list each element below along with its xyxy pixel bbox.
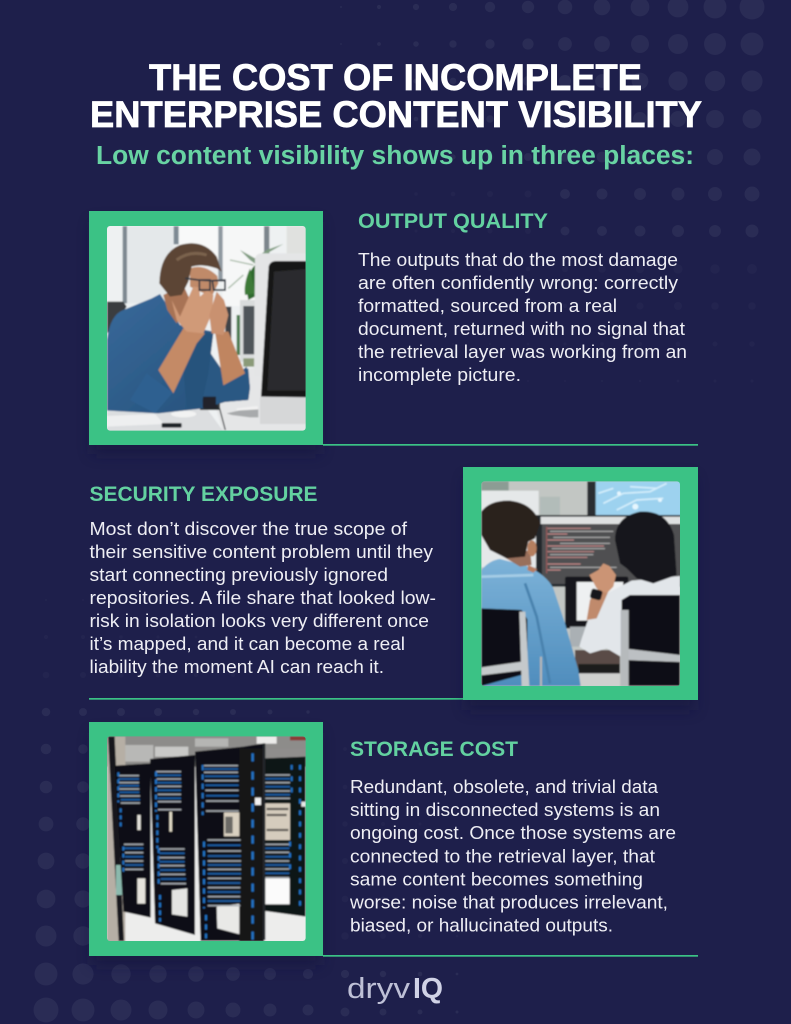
photo: two developers at monitors: [480, 480, 682, 687]
photo frame: output quality: [89, 211, 323, 454]
text: storage cost body: Redundant, obsolete, and trivial data: [350, 776, 659, 797]
text: security exposure body: liability the moment AI can reach it.: [90, 656, 384, 677]
text: security exposure body: it’s mapped, and it can become a real: [90, 633, 405, 654]
photo frame: storage cost: [89, 722, 323, 965]
text: output quality body: The outputs that do the most damage: [358, 249, 678, 270]
panel: security exposure: [89, 467, 698, 710]
text: storage cost body: same content becomes something: [350, 868, 643, 890]
logo: dryvIQ: dryv: [347, 973, 411, 1005]
text: output quality body: are often confidently wrong: correctly: [358, 272, 679, 293]
text: storage cost body: ongoing cost. Once those systems are: [350, 822, 676, 843]
text: output quality body: [358, 249, 687, 385]
text: output quality body: incomplete picture.: [358, 364, 521, 385]
heading: output quality: OUTPUT QUALITY: [358, 209, 548, 233]
logo: dryvIQ: IQ: [413, 973, 443, 1005]
text: storage cost body: worse: noise that produces irrelevant,: [349, 892, 668, 912]
text: storage cost body: [349, 776, 676, 936]
text: storage cost body: biased, or hallucinated outputs.: [350, 914, 613, 936]
text: output quality body: the retrieval layer was working from an: [358, 341, 687, 362]
text: security exposure body: [90, 518, 436, 677]
logo: dryvIQ: [347, 973, 443, 1005]
photo: stressed man at desk: [105, 223, 308, 433]
photo: server racks: [106, 735, 307, 945]
text: security exposure body: repositories. A file share that looked low-: [90, 587, 436, 608]
text: security exposure body: risk in isolation looks very different once: [90, 610, 429, 631]
text: security exposure body: start connecting previously ignored: [90, 564, 388, 585]
heading: security exposure: SECURITY EXPOSURE: [90, 482, 318, 506]
text: security exposure body: Most don’t discover the true scope of: [90, 518, 408, 539]
subtitle: Low content visibility shows up in three places:: [96, 142, 694, 170]
heading: storage cost: STORAGE COST: [350, 737, 518, 761]
text: security exposure body: their sensitive content problem until they: [90, 541, 434, 562]
panel: storage cost: [89, 722, 698, 965]
title: [90, 56, 702, 135]
text: output quality body: document, returned with no signal that: [358, 318, 686, 339]
text: storage cost body: sitting in disconnected systems is an: [350, 799, 660, 820]
title: THE COST OF INCOMPLETE: [149, 56, 642, 98]
panel: output quality: [89, 209, 698, 454]
photo frame: security exposure: [463, 467, 698, 710]
title: ENTERPRISE CONTENT VISIBILITY: [90, 93, 702, 135]
text: storage cost body: connected to the retrieval layer, that: [350, 846, 656, 866]
text: output quality body: formatted, sourced from a real: [358, 295, 617, 316]
